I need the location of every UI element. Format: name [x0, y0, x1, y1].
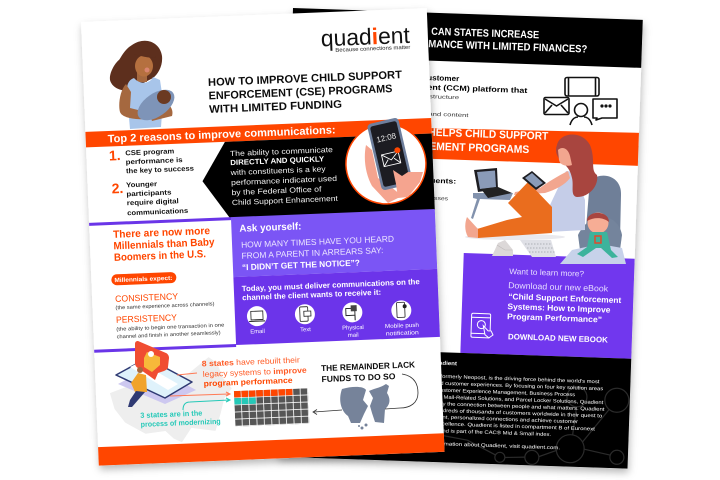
icon: physical mail: [341, 302, 364, 339]
millennials panel: channel and finish in another seamlessly): [117, 330, 221, 340]
orange band heading: [288, 121, 639, 166]
title: WITH LIMITED FUNDING: [209, 99, 342, 116]
icon: text: Text: [300, 327, 311, 333]
reason 1: performance is: [126, 157, 183, 166]
channels panel: channel the client wants to receive it:: [242, 288, 381, 302]
CCM text: ent (CCM) platform that: [427, 83, 528, 95]
illustration: woman with laptop and child: [465, 134, 626, 264]
black about footer: [278, 347, 631, 469]
black arrow panel: [201, 134, 435, 219]
purple ebook panel: Systems: How to Improve: [507, 302, 611, 315]
back header band: MANCE WITH LIMITED FINANCES?: [428, 38, 587, 56]
curved arrow to grid: [313, 374, 418, 414]
reason 2: [111, 177, 188, 218]
black arrow panel: performance indicator used: [231, 174, 337, 187]
remainder text: THE REMAINDER LACK: [321, 359, 416, 373]
millennials panel: (the same experience across channels): [115, 301, 215, 311]
benefits text: sses: [434, 196, 448, 202]
states text 8: program performance: [203, 376, 293, 388]
black arrow panel: by the Federal Office of: [231, 184, 323, 197]
phone circle: [344, 122, 428, 205]
child cushion: [560, 244, 626, 264]
benefits text: uents:: [430, 178, 456, 186]
black about footer: formerly Neopost, is the driving force behind the world's most: [440, 374, 600, 385]
CCM text: [426, 73, 528, 121]
back page: [278, 8, 643, 469]
icon: mobile push: Mobile push: [385, 323, 419, 330]
orange reasons banner: [85, 118, 432, 147]
icon: email: [247, 306, 268, 336]
millennials panel: CONSISTENCY: [115, 291, 178, 304]
back header band: CAN STATES INCREASE: [431, 26, 539, 41]
front page: [81, 8, 445, 466]
millennials panel: Boomers in the U.S.: [114, 248, 206, 264]
black arrow panel: Child Support Enhancement: [232, 194, 339, 207]
millennials panel: (the ability to begin one transaction in one: [116, 322, 225, 333]
title: [208, 69, 403, 116]
black about footer: adient: [439, 361, 457, 367]
orange band heading: EMENT PROGRAMS: [429, 141, 530, 156]
icon: physical mail: Physical: [342, 325, 364, 332]
illustration: broken piggy bank: [340, 384, 389, 430]
reason 1: CSE program: [125, 148, 174, 157]
black about footer: ant, personalized connections and achieve customer: [439, 415, 579, 425]
CCM text: structure: [429, 94, 459, 101]
millennials panel: There are now more: [113, 225, 210, 241]
millennials panel: PERSISTENCY: [116, 312, 177, 325]
black about footer: ustomer Experience Management, Business Process: [440, 388, 576, 398]
cushions: [585, 176, 621, 240]
orange band heading: HELPS CHILD SUPPORT: [428, 127, 549, 143]
ask yourself panel: FROM A PARENT IN ARREARS SAY:: [241, 245, 384, 261]
pants: [477, 182, 552, 238]
ask yourself panel: [231, 209, 437, 277]
states text 3: process of modernizing: [141, 417, 221, 429]
network pattern: [428, 382, 629, 468]
icon: channels and person: [544, 78, 617, 125]
title: HOW TO IMPROVE CHILD SUPPORT: [208, 69, 402, 89]
black arrow panel: DIRECTLY AND QUICKLY: [230, 154, 324, 167]
face: [558, 148, 572, 166]
reason 2: participants: [126, 190, 172, 198]
illustration: hands holding phone: 12:08: [376, 131, 398, 145]
black about footer: ify the connection between people and what matters. Quadient: [440, 401, 605, 413]
illustration: mother and baby: [110, 41, 180, 129]
reason 1: 1.: [109, 147, 121, 163]
logo: quadient: [320, 22, 411, 51]
tablet: [522, 171, 546, 190]
black about footer: xcellence. Quadient is listed in compartment B of Euronext: [439, 421, 596, 433]
icon: mobile push: notification: [386, 330, 419, 338]
millennials panel: Millennials than Baby: [113, 236, 215, 252]
remainder text: [321, 359, 416, 384]
black about footer: d customer experiences. By focusing on four key solution areas: [440, 381, 604, 392]
reason 2: 2.: [111, 180, 124, 196]
orange reasons banner: Top 2 reasons to improve communications:: [107, 124, 336, 146]
purple divider strip: [89, 217, 231, 226]
reason 2: Younger: [126, 181, 158, 189]
icon: mobile push: [384, 300, 419, 338]
ask yourself panel: Ask yourself:: [239, 221, 302, 235]
illustration: hands holding phone: [365, 117, 423, 203]
icon: text: [295, 304, 316, 334]
reason 1: [109, 144, 194, 176]
reason 1: the key to success: [126, 166, 194, 175]
pill: Millennials expect:: [114, 276, 173, 284]
benefits text: [429, 178, 456, 203]
envelope: [492, 240, 513, 256]
torso and arm: [548, 171, 585, 232]
child: [588, 212, 608, 234]
icon: physical mail: mail: [348, 333, 359, 339]
title: ENFORCEMENT (CSE) PROGRAMS: [208, 83, 393, 102]
purple ebook panel: [460, 253, 635, 359]
CCM text: and content: [428, 112, 469, 119]
black about footer: ndreds of thousands of customers worldwide in their quest to: [439, 408, 603, 419]
purple lower strip: [94, 344, 236, 353]
states text 3: 3 states are in the: [140, 408, 202, 420]
states text 3: [140, 408, 221, 429]
purple ebook panel: Download our new eBook: [508, 280, 609, 294]
illustration: person on giant phone with message: [116, 341, 196, 407]
orange footer bar: [98, 433, 445, 466]
ask yourself panel: HOW MANY TIMES HAVE YOU HEARD: [241, 234, 394, 250]
black arrow panel: The ability to communicate: [230, 145, 333, 158]
hair: [556, 134, 597, 197]
purple ebook panel: Program Performance”: [507, 312, 602, 324]
icon: email: Email: [250, 329, 265, 335]
remainder text: FUNDS TO DO SO: [321, 371, 396, 384]
channels panel: [233, 269, 440, 345]
black about footer: , Mail-Related Solutions, and Parcel Locker Solutions, Quadient: [440, 395, 604, 406]
states text 8: legacy systems to improve: [203, 366, 307, 379]
connector lines: [170, 373, 230, 410]
purple ebook panel: DOWNLOAD NEW EBOOK: [508, 332, 608, 345]
states text 8: 8 states have rebuilt their: [202, 355, 300, 368]
icon: tablet with hand: [471, 313, 494, 338]
black about footer: and is part of the CAC® Mid & Small index.: [439, 427, 551, 438]
purple ebook panel: “Child Support Enforcement: [508, 292, 622, 305]
black about footer: ormation about Quadient, visit quadient.com.: [438, 441, 560, 451]
ask yourself panel: “I DIDN’T GET THE NOTICE”?: [242, 258, 360, 272]
laptop table: [471, 193, 513, 219]
millennials panel: [109, 225, 225, 340]
purple ebook panel: Want to learn more?: [509, 267, 585, 279]
states waffle grid: [234, 388, 309, 427]
logo: Because connections matter: [335, 45, 411, 54]
calendar: [520, 240, 556, 257]
channels panel: Today, you must deliver communications on the: [242, 277, 421, 293]
CCM text: ustomer: [427, 73, 459, 83]
foot: [465, 217, 478, 238]
reason 2: communications: [127, 208, 188, 217]
map of the US: [109, 356, 234, 445]
reason 2: require digital: [127, 198, 179, 207]
black arrow panel: with constituents is a key: [229, 164, 326, 177]
states text 8: [202, 355, 308, 388]
back header band: [291, 8, 643, 68]
